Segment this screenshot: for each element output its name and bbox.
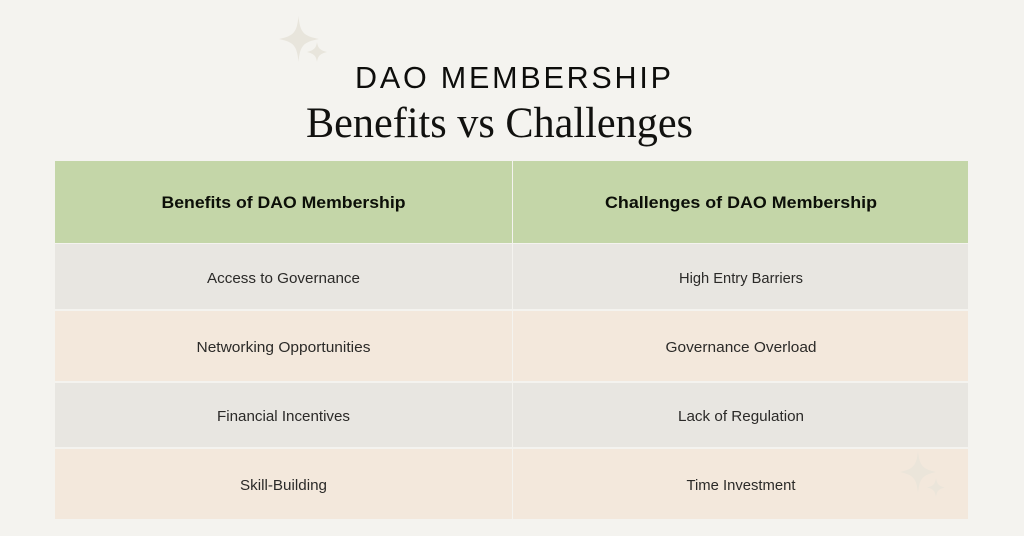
icon: sparkles bottom xyxy=(900,451,945,497)
header: benefits xyxy=(55,161,512,243)
row 1 challenge xyxy=(513,244,968,309)
row 1 benefit xyxy=(55,244,512,309)
header: benefits: Benefits of DAO Membership xyxy=(162,193,406,212)
row 4 benefit xyxy=(55,449,512,519)
row 3 benefit: Financial Incentives xyxy=(217,409,350,425)
row 3 benefit xyxy=(55,383,512,447)
title xyxy=(306,61,693,147)
row 2 benefit xyxy=(55,311,512,381)
row 1 benefit: Access to Governance xyxy=(207,271,360,287)
row 1 challenge: High Entry Barriers xyxy=(679,271,803,287)
row 3 challenge xyxy=(513,383,968,447)
row 2 challenge: Governance Overload xyxy=(666,340,816,356)
row 2 benefit: Networking Opportunities xyxy=(196,340,370,356)
subtitle: Benefits vs Challenges: Benefits vs Challenges xyxy=(306,100,693,147)
row 4 benefit: Skill-Building xyxy=(240,478,327,494)
title line: DAO MEMBERSHIP: DAO MEMBERSHIP xyxy=(355,61,671,95)
icon: sparkles top xyxy=(279,16,327,62)
comparison table xyxy=(55,161,968,519)
header: challenges: Challenges of DAO Membership xyxy=(605,193,877,212)
row 2 challenge xyxy=(513,311,968,381)
row 3 challenge: Lack of Regulation xyxy=(678,409,804,425)
row 4 challenge: Time Investment xyxy=(686,478,796,494)
header: challenges xyxy=(513,161,968,243)
row 4 challenge xyxy=(513,449,968,519)
